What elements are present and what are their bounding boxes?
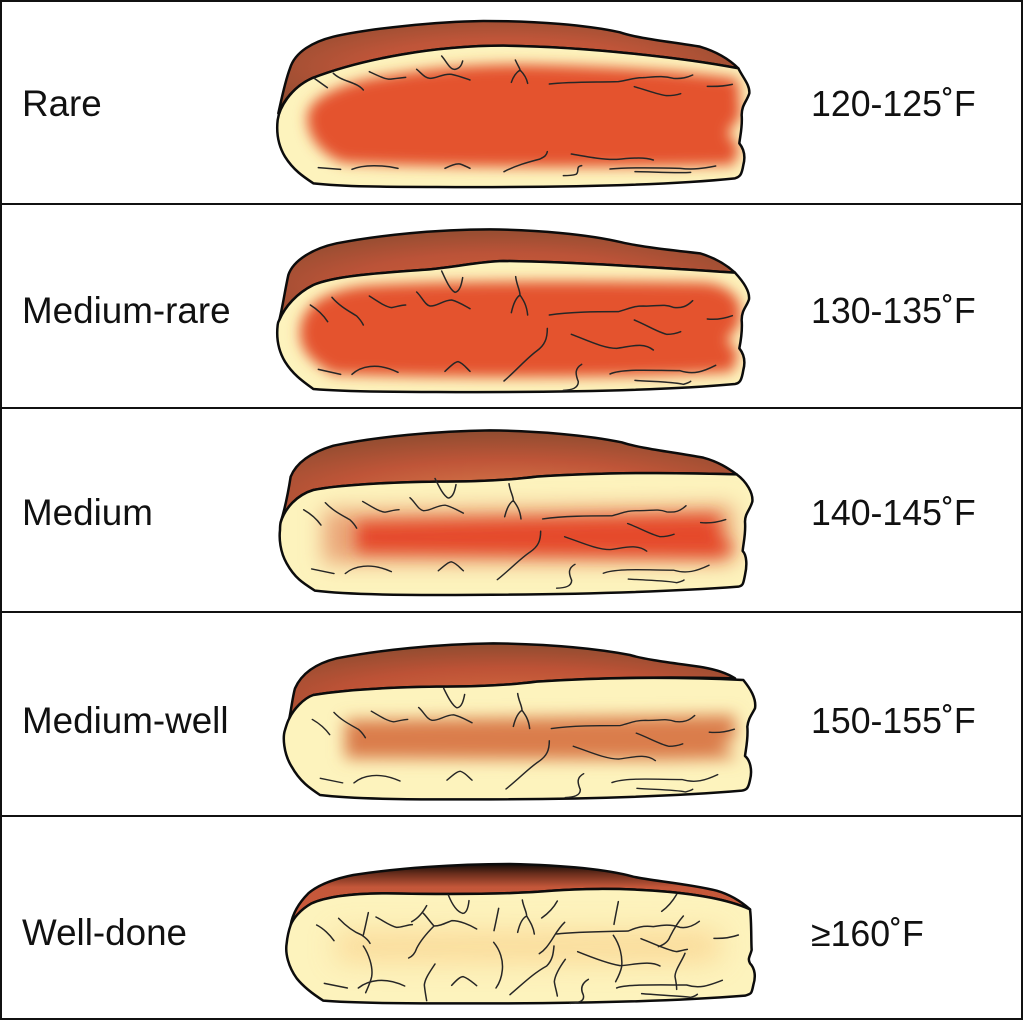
steak flesh bbox=[277, 46, 749, 187]
label: Medium-well: Medium-well bbox=[22, 700, 229, 741]
rare red centre bbox=[307, 64, 741, 167]
panel: rare bbox=[1, 1, 1022, 204]
steak flesh bbox=[284, 678, 755, 799]
marbling bbox=[314, 56, 732, 176]
illustration: medium-rare steak bbox=[277, 229, 749, 392]
label: Medium: Medium bbox=[22, 492, 153, 533]
marbling bbox=[312, 688, 734, 798]
well-done faint tan centre bbox=[337, 932, 720, 962]
illustration: medium steak bbox=[280, 430, 752, 595]
temperature: rare: 120-125˚F bbox=[811, 84, 976, 124]
illustration: medium-well steak bbox=[284, 643, 755, 799]
temperature: medium-well: 150-155˚F bbox=[811, 701, 976, 741]
steak crust bbox=[279, 229, 735, 320]
label: Medium-rare: Medium-rare bbox=[22, 290, 231, 331]
panel: well-done bbox=[1, 816, 1022, 1019]
label: Rare: Rare bbox=[22, 83, 102, 124]
flesh outline bbox=[280, 473, 752, 595]
steak crust bbox=[291, 864, 750, 925]
medium-rare red centre bbox=[300, 281, 741, 377]
medium pink halo bbox=[323, 505, 735, 563]
steak flesh bbox=[280, 473, 752, 595]
steak crust bbox=[281, 430, 737, 522]
temperature: medium-rare: 130-135˚F bbox=[811, 291, 976, 331]
illustration: well-done steak bbox=[286, 864, 755, 1003]
temperature: well-done: ≥160˚F bbox=[811, 914, 924, 954]
steak crust bbox=[289, 643, 735, 718]
panel: medium-rare bbox=[1, 204, 1022, 408]
steak crust bbox=[278, 21, 738, 113]
flesh outline bbox=[286, 889, 755, 1003]
marbling bbox=[310, 271, 732, 390]
steak flesh bbox=[286, 889, 755, 1003]
illustration: rare steak bbox=[277, 21, 749, 187]
medium red centre bbox=[357, 515, 735, 557]
marbling bbox=[304, 478, 726, 588]
steak flesh bbox=[277, 261, 749, 392]
panel: medium-well bbox=[1, 612, 1022, 816]
medium-well tan centre bbox=[345, 715, 738, 760]
temperature: medium: 140-145˚F bbox=[811, 493, 976, 533]
marbling bbox=[317, 894, 738, 1003]
panel: medium bbox=[1, 408, 1022, 612]
flesh outline bbox=[277, 261, 749, 392]
flesh outline bbox=[284, 678, 755, 799]
label: Well-done: Well-done bbox=[22, 912, 187, 953]
flesh outline bbox=[277, 46, 749, 187]
